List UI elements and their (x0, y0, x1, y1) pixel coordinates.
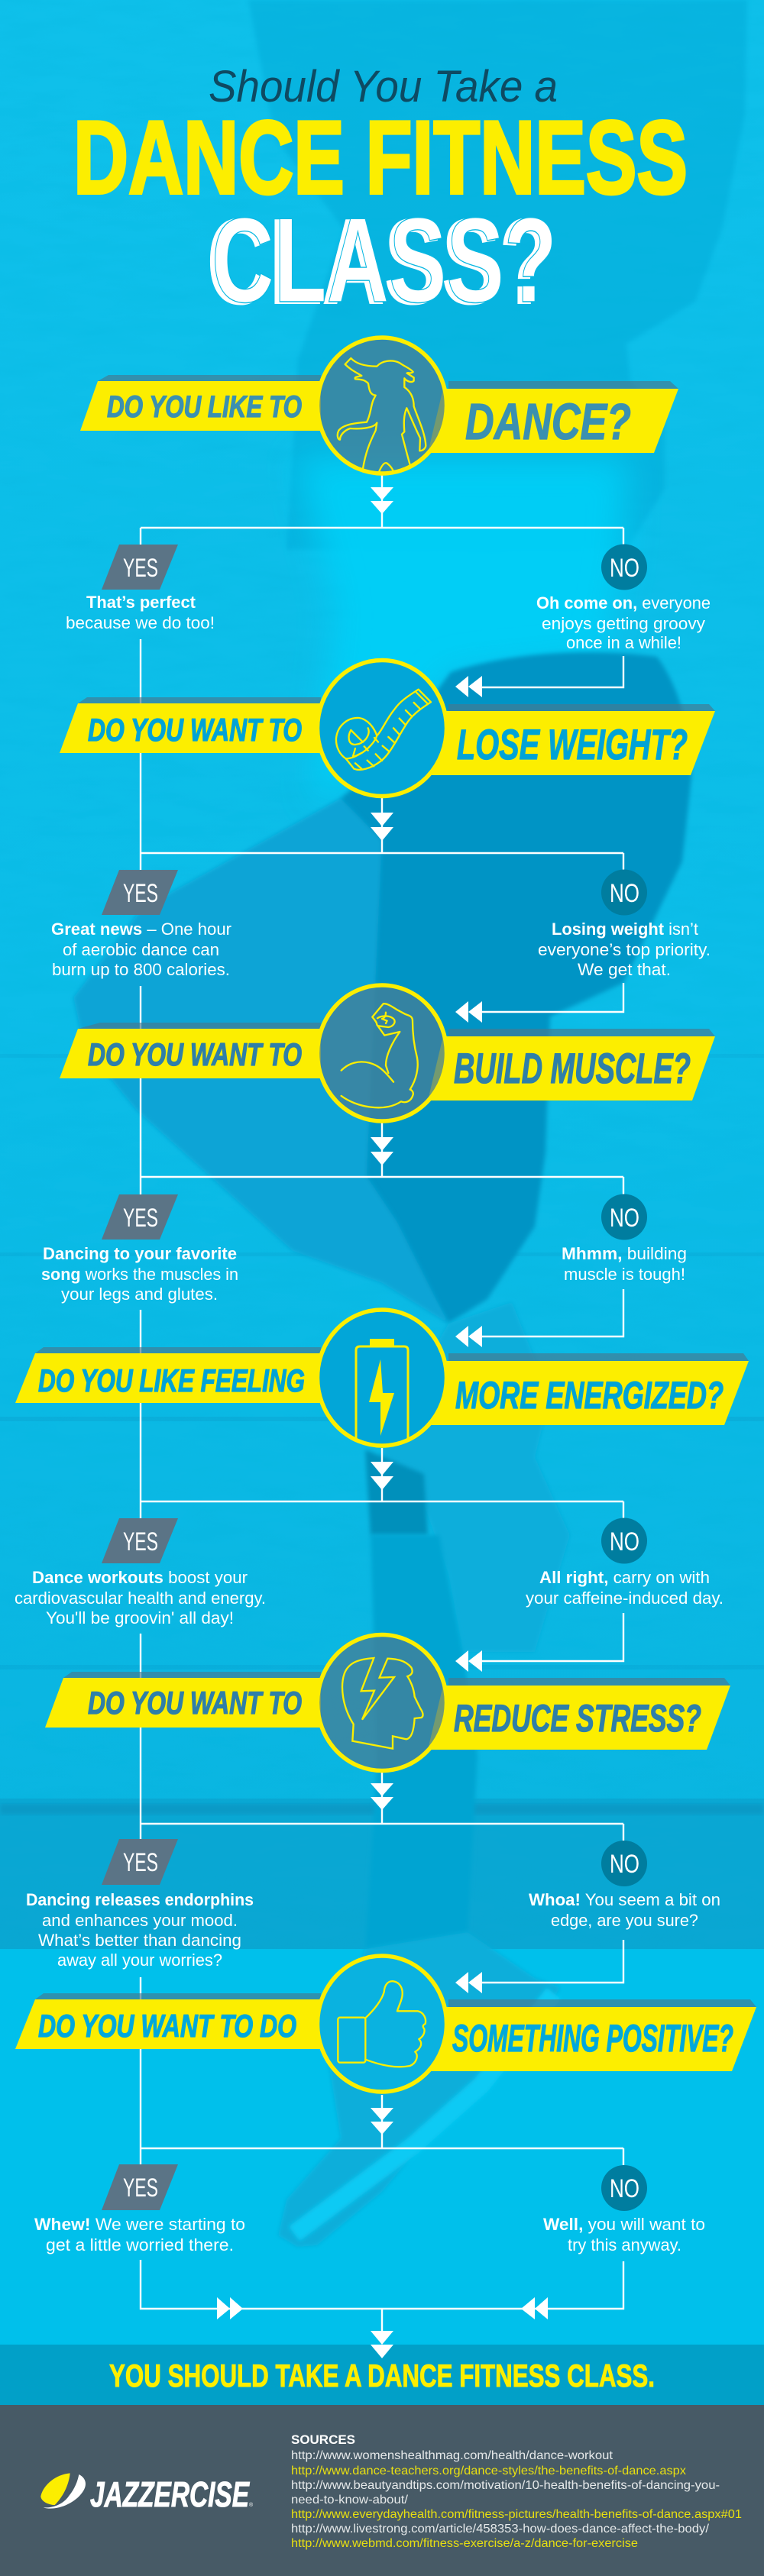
answer: no 5: edge, are you sure? (551, 1911, 698, 1930)
answer: yes 4: YES (123, 1527, 158, 1556)
answer: yes 4: You'll be groovin' all day! (46, 1608, 234, 1627)
answer: yes 2: burn up to 800 calories. (52, 960, 230, 979)
answer: yes 3: YES (123, 1204, 158, 1233)
answer: no 5: Whoa! You seem a bit on (529, 1890, 720, 1909)
left banner (60, 703, 321, 753)
answer: yes 6: YES (123, 2174, 158, 2203)
circle (318, 985, 446, 1121)
sources list: http://www.everydayhealth.com/fitness-pictures/health-benefits-of-dance.aspx#01 (291, 2508, 742, 2521)
answer: yes 5: Dancing releases endorphins (26, 1890, 254, 1909)
answer: no 2: Losing weight isn’t (552, 920, 698, 939)
circle (318, 1634, 446, 1770)
circle (318, 1310, 446, 1446)
right banner (428, 2007, 756, 2071)
icon: dancer (338, 358, 426, 472)
sources list: need-to-know-about/ (291, 2494, 409, 2507)
sources list: http://www.livestrong.com/article/458353-how-does-dance-affect-the-body/ (291, 2523, 710, 2536)
answer: yes 5: YES (123, 1848, 158, 1877)
right banner (428, 1686, 730, 1750)
question text left: DO YOU WANT TO (88, 712, 302, 748)
answer: yes 5 (26, 1839, 254, 1970)
answer: yes 3: your legs and glutes. (61, 1285, 218, 1304)
circle (318, 1956, 446, 2092)
answer: yes 4 (15, 1518, 266, 1627)
answer: no 2 (538, 869, 711, 979)
answer: yes 2: Great news – One hour (51, 920, 231, 939)
conclusion band (0, 2345, 764, 2405)
title (73, 62, 688, 329)
question 5: reduce stress (45, 1634, 730, 1770)
answer: yes 2 (51, 870, 231, 979)
icon: flexed arm (342, 1004, 418, 1107)
icon: measuring tape (336, 690, 431, 770)
question 2: lose weight (60, 660, 715, 796)
question 3: build muscle (60, 985, 715, 1121)
sources list: http://www.beautyandtips.com/motivation/10-health-benefits-of-dancing-you- (291, 2479, 720, 2492)
answer: no 4: NO (610, 1527, 639, 1556)
left banner (80, 381, 321, 431)
arrows: double triangles pointing down (371, 487, 393, 2135)
logo: Jazzercise: JAZZERCISE (90, 2474, 250, 2514)
circle (318, 338, 446, 474)
answer: no 3 (562, 1194, 687, 1284)
question text right: DANCE? (465, 393, 631, 451)
right banner (428, 1361, 749, 1425)
answer: yes 3 (41, 1194, 238, 1304)
answer: yes 6 (34, 2164, 245, 2254)
answer: yes 5: away all your worries? (57, 1951, 222, 1970)
arrows into conclusion (217, 2297, 548, 2358)
answer: no 3: NO (610, 1204, 639, 1233)
answer: no 1 (536, 544, 711, 652)
left banner (15, 1999, 321, 2049)
question text left: DO YOU LIKE TO (107, 390, 302, 424)
question text left: DO YOU WANT TO (88, 1685, 302, 1721)
sources list: http://www.webmd.com/fitness-exercise/a-z/dance-for-exercise (291, 2537, 638, 2550)
answer: no 6: Well, you will want to (543, 2215, 705, 2234)
answer: no 2: We get that. (578, 960, 671, 979)
title line: Should You Take a: Should You Take a (209, 62, 558, 112)
sources list: SOURCES (291, 2432, 355, 2447)
answer: yes 1: That’s perfect (86, 593, 196, 612)
answer: no 1: once in a while! (566, 633, 681, 652)
answer: yes 5: and enhances your mood. (42, 1911, 238, 1930)
flowchart connector lines (141, 474, 623, 2337)
left banner (15, 1353, 321, 1403)
answer: yes 5: What’s better than dancing (38, 1931, 241, 1950)
answer: no 1: enjoys getting groovy (542, 614, 705, 633)
question text left: DO YOU WANT TO DO (38, 2008, 296, 2044)
question text left: DO YOU WANT TO (88, 1036, 302, 1072)
answer: yes 1 (66, 545, 215, 632)
answer: no 1: Oh come on, everyone (536, 593, 711, 612)
logo: Jazzercise: ® (249, 2502, 254, 2508)
icon: battery with lightning bolt (356, 1339, 408, 1440)
answer: yes 6: get a little worried there. (46, 2235, 234, 2254)
answer: no 6 (543, 2165, 705, 2254)
icon: thumbs up (338, 1981, 426, 2067)
answer: no 4: All right, carry on with (539, 1568, 710, 1587)
question 4: more energized (15, 1310, 749, 1446)
right banner (428, 1036, 715, 1101)
logo: Jazzercise (40, 2473, 254, 2514)
answer: no 6: try this anyway. (568, 2235, 681, 2254)
answer: yes 3: song works the muscles in (41, 1265, 238, 1284)
question text left: DO YOU LIKE FEELING (38, 1362, 305, 1398)
answer: no 4: your caffeine-induced day. (526, 1589, 724, 1608)
right banner (428, 389, 678, 453)
icon: head with lightning bolt (342, 1658, 422, 1749)
answer: yes 4: cardiovascular health and energy. (15, 1589, 266, 1608)
answer: yes 2: of aerobic dance can (63, 940, 219, 959)
answer: no 1: NO (610, 554, 639, 583)
question 6: something positive (15, 1956, 756, 2092)
answer: no 3: Mhmm, building (562, 1244, 687, 1263)
right banner (428, 711, 715, 775)
answer: no 2: NO (610, 879, 639, 908)
title line: CLASS?: CLASS? (212, 193, 557, 328)
answer: no 3: muscle is tough! (564, 1265, 685, 1284)
question 1: do you like to dance (80, 338, 678, 474)
answer: no 4 (526, 1518, 724, 1608)
answer: no 5: NO (610, 1850, 639, 1879)
answer: yes 6: Whew! We were starting to (34, 2215, 245, 2234)
answer: yes 2: YES (123, 879, 158, 908)
answer: yes 4: Dance workouts boost your (32, 1568, 248, 1587)
answer: no 2: everyone’s top priority. (538, 940, 711, 959)
answer: no 5 (529, 1841, 720, 1930)
sources list: http://www.dance-teachers.org/dance-styles/the-benefits-of-dance.aspx (291, 2464, 686, 2477)
answer: yes 3: Dancing to your favorite (43, 1244, 237, 1263)
title line: CLASS?: CLASS? (207, 195, 552, 329)
arrows: double triangles pointing left (455, 676, 482, 1993)
circle (318, 660, 446, 796)
sources list (291, 2432, 742, 2550)
answer: no 6: NO (610, 2174, 639, 2203)
footer panel (0, 2405, 764, 2576)
answer: yes 1: because we do too! (66, 613, 215, 632)
left banner (45, 1678, 321, 1728)
sources list: http://www.womenshealthmag.com/health/dance-workout (291, 2449, 613, 2462)
answer: yes 1: YES (123, 554, 158, 583)
left banner (60, 1029, 321, 1078)
